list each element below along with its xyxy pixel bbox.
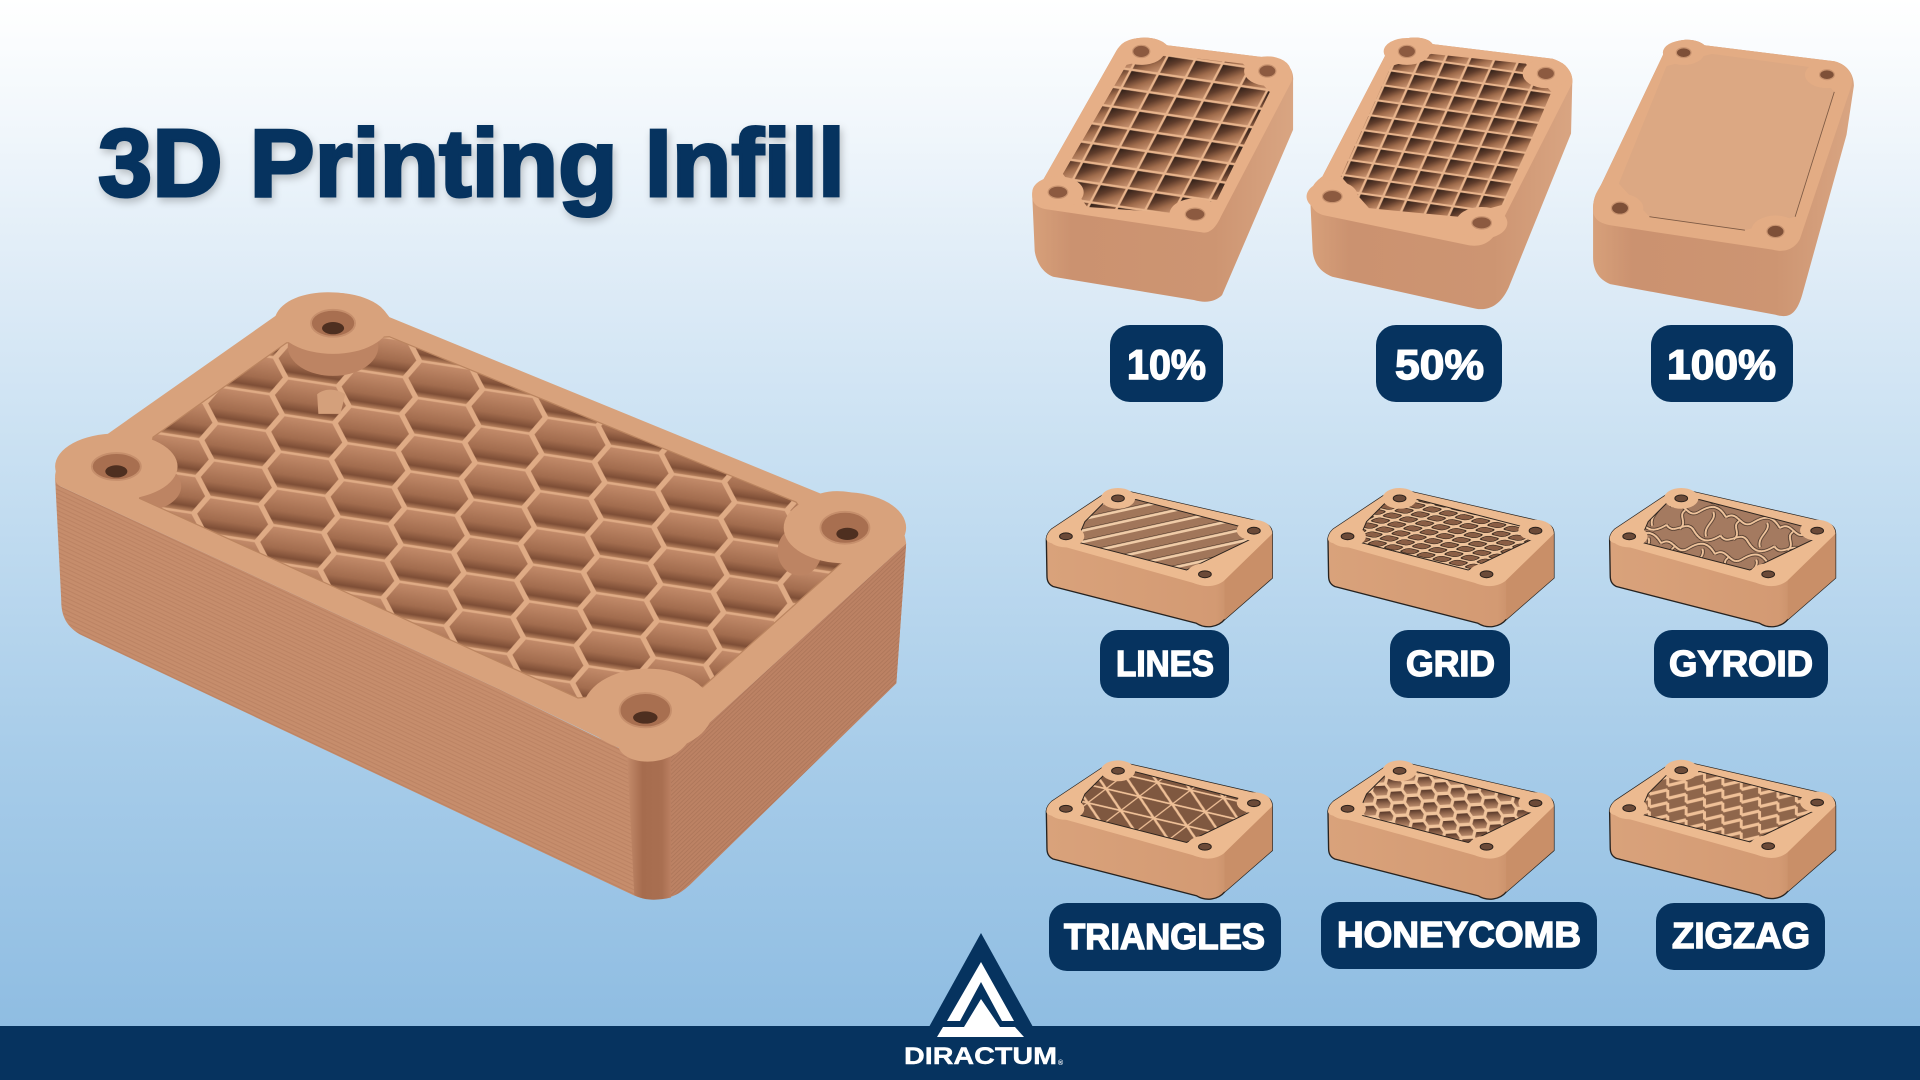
label: grid <box>1390 630 1510 698</box>
logo base <box>937 999 1024 1037</box>
label: triangles: TRIANGLES <box>1064 916 1265 957</box>
main print boss walls <box>140 343 820 574</box>
logo wordmark: DIRACTUM <box>904 1043 1057 1070</box>
title: 3D Printing Infill <box>98 110 845 217</box>
label: lines <box>1100 630 1229 698</box>
main print front layers <box>55 478 637 896</box>
main print right face <box>661 544 906 899</box>
10 percent infill print <box>1032 38 1293 302</box>
main print corner band <box>627 752 671 900</box>
logo registered mark: ® <box>1058 1059 1064 1067</box>
gyroid pattern print <box>1610 488 1836 627</box>
label: 50%: 50% <box>1395 341 1484 388</box>
label: zigzag <box>1656 903 1825 970</box>
label: gyroid: GYROID <box>1669 643 1813 684</box>
grid pattern print <box>1328 488 1554 627</box>
label: triangles <box>1049 903 1281 971</box>
main print broken infill detail <box>317 390 345 414</box>
lines pattern print <box>1046 488 1272 627</box>
100 percent infill print <box>1593 40 1854 316</box>
logo chevron <box>947 962 1014 1021</box>
main print screw holes <box>92 310 869 727</box>
main print bosses <box>55 293 906 752</box>
main print right face layers <box>661 544 906 899</box>
zigzag pattern print <box>1610 760 1836 899</box>
main honeycomb infill print <box>55 292 906 900</box>
label: honeycomb <box>1321 902 1597 969</box>
logo: Diractum <box>904 933 1064 1070</box>
label: 100%: 100% <box>1667 341 1776 388</box>
main print hole shadows <box>105 322 858 724</box>
label: lines: LINES <box>1116 643 1214 684</box>
label: 50% <box>1376 325 1502 402</box>
label: grid: GRID <box>1406 643 1495 684</box>
label: 100% <box>1651 325 1793 402</box>
main print top rim <box>55 292 906 762</box>
main print honeycomb cavity <box>140 337 842 698</box>
50 percent infill print <box>1307 37 1572 309</box>
triangles pattern print <box>1046 760 1272 899</box>
label: 10% <box>1110 325 1223 402</box>
label: honeycomb: HONEYCOMB <box>1337 914 1581 955</box>
main print body <box>55 478 906 899</box>
logo triangle <box>929 933 1033 1027</box>
label: gyroid <box>1654 630 1828 698</box>
label: 10%: 10% <box>1127 341 1206 388</box>
honeycomb pattern print <box>1328 760 1554 899</box>
label: zigzag: ZIGZAG <box>1672 915 1810 956</box>
footer bar <box>0 1026 1920 1080</box>
